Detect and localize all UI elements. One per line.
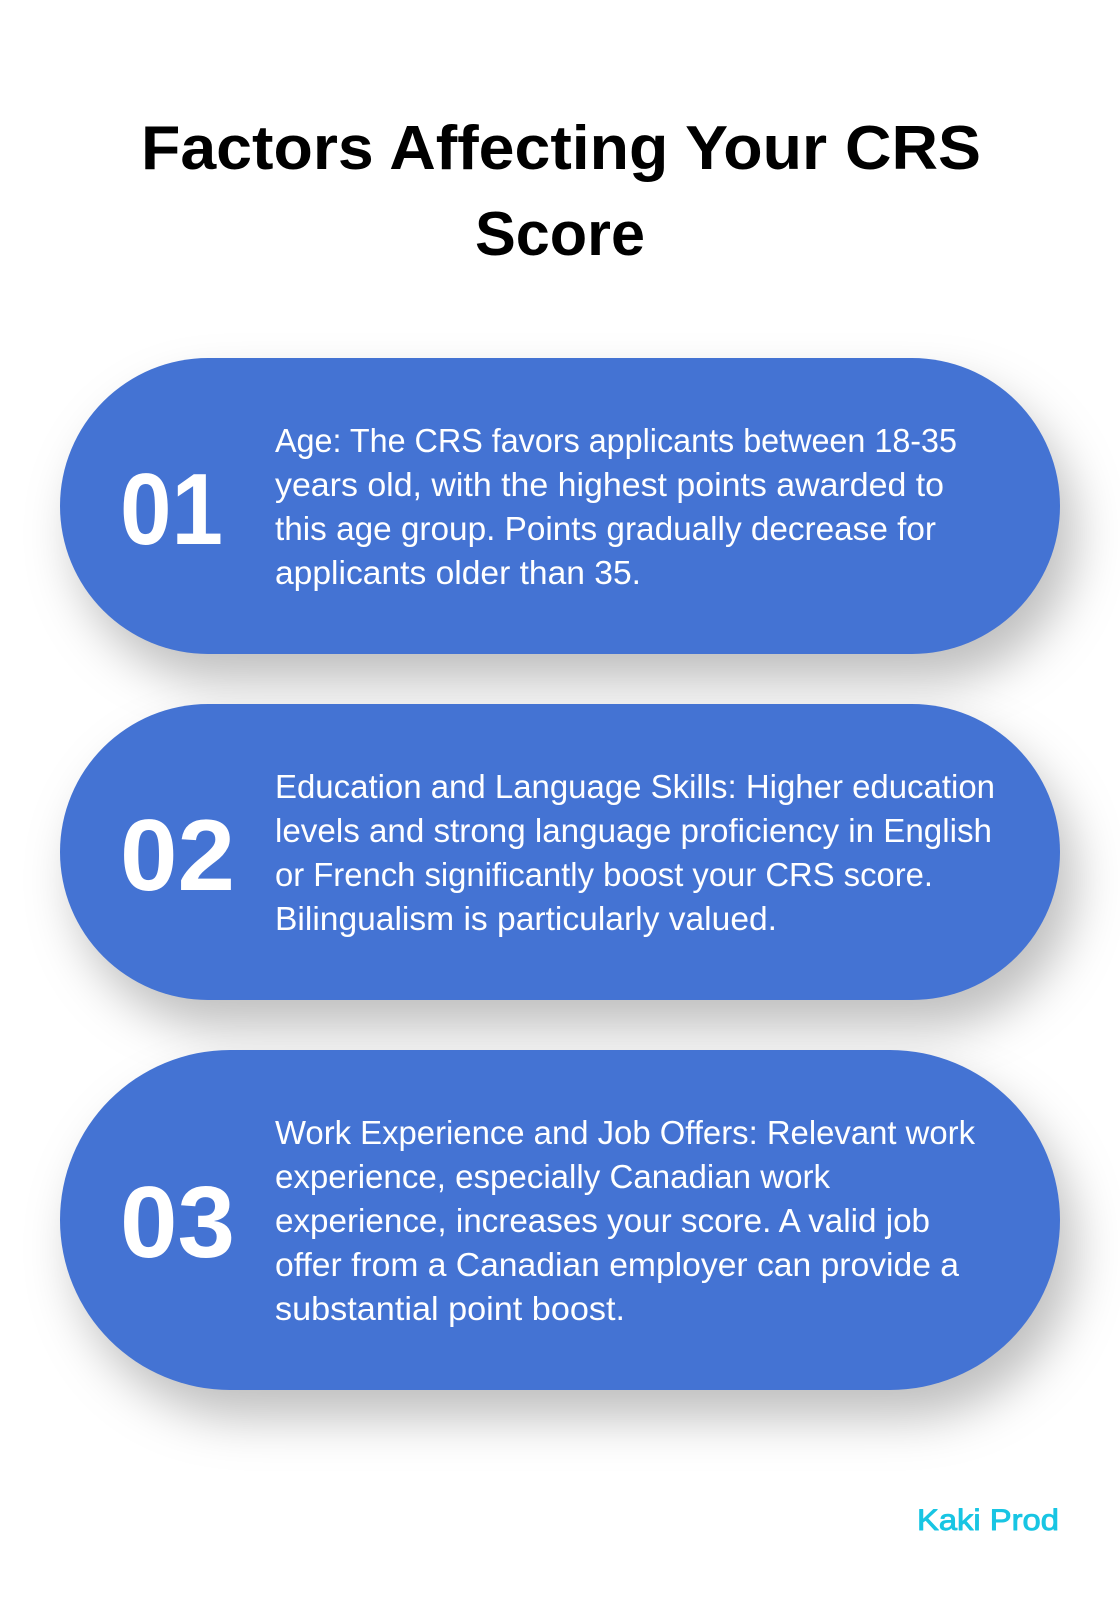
text block 01: applicants older than 35. <box>275 554 641 591</box>
title <box>141 114 981 269</box>
panel: factor 03 work experience <box>60 1050 1060 1390</box>
pill background 02 <box>60 704 1060 1000</box>
title: Score <box>475 200 645 269</box>
pill background 01 <box>60 358 1060 654</box>
text block 02: or French significantly boost your CRS score. <box>275 856 933 893</box>
text block 03: substantial point boost. <box>275 1290 625 1327</box>
pill background 03 <box>60 1050 1060 1390</box>
logo: Kaki Prod: Kaki Prod <box>917 1504 1059 1537</box>
text block 03: Work Experience and Job Offers: Relevant work <box>275 1114 975 1151</box>
number 01: 01 <box>120 454 223 566</box>
text block 02: levels and strong language proficiency in English <box>275 812 992 849</box>
text block 01: this age group. Points gradually decrease for <box>275 510 936 547</box>
text block 03: experience, increases your score. A valid job <box>275 1202 930 1239</box>
title: Factors Affecting Your CRS <box>141 114 981 183</box>
panel: factor 02 education and language <box>60 704 1060 1000</box>
number 02: 02 <box>120 800 235 912</box>
text block 02 <box>275 768 995 937</box>
text block 03: offer from a Canadian employer can provide a <box>275 1246 960 1283</box>
text block 02: Bilingualism is particularly valued. <box>275 900 777 937</box>
text block 01 <box>275 422 957 591</box>
text block 02: Education and Language Skills: Higher education <box>275 768 995 805</box>
text block 01: Age: The CRS favors applicants between 18-35 <box>275 422 957 459</box>
number 03: 03 <box>120 1167 235 1279</box>
panel: factor 01 age <box>60 358 1060 654</box>
text block 03 <box>275 1114 975 1327</box>
text block 01: years old, with the highest points awarded to <box>275 466 944 503</box>
text block 03: experience, especially Canadian work <box>275 1158 830 1195</box>
